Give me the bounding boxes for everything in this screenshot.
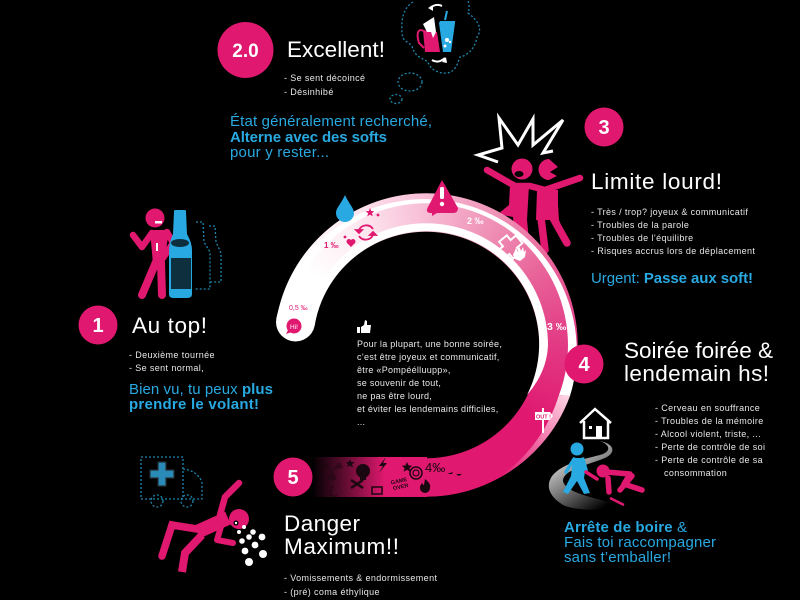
- icon: person with bottles: [133, 208, 221, 298]
- label: 1 per mille: 1 ‰: [324, 241, 339, 250]
- panel: step 4 soirée foirée: [549, 338, 773, 566]
- callout: État généralement recherché,: [230, 113, 432, 130]
- text block: intro: être «Pompéélluupp»,: [357, 365, 451, 375]
- text block: intro: ...: [357, 417, 365, 427]
- badge 3: [584, 108, 624, 146]
- list: [591, 207, 755, 256]
- label: game over: OVER: [393, 483, 409, 492]
- heading: Soirée foirée &: [624, 338, 773, 363]
- icon: cycle arrows: [356, 225, 376, 240]
- label: 4 per mille: 4‰: [425, 460, 445, 475]
- text block: intro: [357, 339, 502, 427]
- list: - Risques accrus lors de déplacement: [591, 246, 755, 256]
- icon: road home with helper: [549, 409, 642, 510]
- progress ring details: [276, 180, 577, 497]
- text block: intro: c’est être joyeux et communicatif,: [357, 352, 500, 362]
- list: - Très / trop? joyeux & communicatif: [591, 207, 748, 217]
- badge 4: [564, 344, 604, 384]
- icon: thought bubble with drinks: [390, 1, 480, 104]
- callout: [230, 113, 432, 161]
- text block: intro: Pour la plupart, une bonne soirée,: [357, 339, 502, 349]
- list: - Perte de contrôle de soi: [655, 442, 765, 452]
- icon: out sign: OUT !: [536, 414, 551, 420]
- heading: [284, 511, 399, 559]
- heading: Au top!: [132, 313, 207, 338]
- list: - Désinhibé: [284, 87, 334, 97]
- icon: water drop: [336, 195, 354, 222]
- badge 2.0: 2.0: [232, 41, 259, 62]
- callout: [129, 381, 273, 413]
- list: - Se sent décoincé: [284, 73, 365, 83]
- list: - Deuxième tournée: [129, 350, 215, 360]
- badge 4: 4: [578, 354, 590, 376]
- list: - Se sent normal,: [129, 363, 204, 373]
- text block: intro: et éviter les lendemains difficiles,: [357, 404, 498, 414]
- icon: thumbs up: [357, 320, 371, 333]
- icon: out sign: [535, 408, 553, 433]
- label: game over: GAME: [390, 477, 408, 486]
- list: consommation: [664, 468, 727, 478]
- panel: step 2 excellent: [218, 1, 480, 161]
- icon: Hi bubble: [286, 318, 302, 334]
- list: [284, 73, 365, 97]
- list: - Troubles de la parole: [591, 220, 689, 230]
- list: - (pré) coma éthylique: [284, 587, 380, 597]
- callout: Fais toi raccompagner: [564, 534, 716, 551]
- icon: star and heart: [344, 208, 379, 247]
- icon: warning triangle: [427, 180, 458, 216]
- badge 1: [78, 306, 118, 344]
- heading: [624, 338, 773, 386]
- list: [129, 350, 215, 373]
- icon: falling person vomiting: [162, 483, 267, 572]
- callout: Alterne avec des softs: [230, 129, 387, 146]
- heading: Excellent!: [287, 37, 385, 62]
- list: [284, 573, 437, 597]
- label: 0.5 per mille: 0,5 ‰: [289, 305, 308, 312]
- badge 3: 3: [598, 117, 610, 139]
- panel: central text: [357, 320, 502, 427]
- badge 2.0: [218, 22, 274, 78]
- heading: Maximum!!: [284, 534, 399, 559]
- heading: lendemain hs!: [624, 361, 769, 386]
- callout: [564, 519, 716, 566]
- list: - Cerveau en souffrance: [655, 403, 760, 413]
- badge 1: 1: [92, 315, 104, 337]
- callout: Arrête de boire &: [564, 519, 687, 536]
- text block: intro: ne pas être lourd,: [357, 391, 432, 401]
- panel: step 1 au top: [78, 208, 273, 413]
- heading: Limite lourd!: [591, 169, 722, 194]
- callout: Bien vu, tu peux plus: [129, 381, 273, 398]
- icon: Hi bubble: Hi!: [290, 324, 298, 331]
- callout: prendre le volant!: [129, 396, 259, 413]
- list: - Troubles de l’équilibre: [591, 233, 694, 243]
- label: 3 per mille: 3 ‰: [547, 321, 567, 333]
- list: - Perte de contrôle de sa: [655, 455, 763, 465]
- badge 5: 5: [287, 467, 299, 489]
- callout: pour y rester...: [230, 144, 329, 161]
- icon: cross and hand: [494, 231, 526, 263]
- badge 5: [274, 458, 312, 496]
- text block: intro: se souvenir de tout,: [357, 378, 441, 388]
- label: 2 per mille: 2 ‰: [467, 216, 484, 226]
- list: - Alcool violent, triste, ...: [655, 429, 761, 439]
- heading: Danger: [284, 511, 360, 536]
- list: [655, 403, 765, 478]
- callout: Urgent: Passe aux soft!: [591, 270, 753, 287]
- icon: ambulance: [141, 457, 202, 507]
- icons: danger symbols on band: [321, 457, 462, 496]
- list: - Troubles de la mémoire: [655, 416, 764, 426]
- panel: step 3 limite lourd: [584, 108, 755, 287]
- callout: sans t’emballer!: [564, 549, 671, 566]
- list: - Vomissements & endormissement: [284, 573, 437, 583]
- panel: step 5 danger: [141, 457, 437, 597]
- progress ring gradient band: [274, 193, 578, 497]
